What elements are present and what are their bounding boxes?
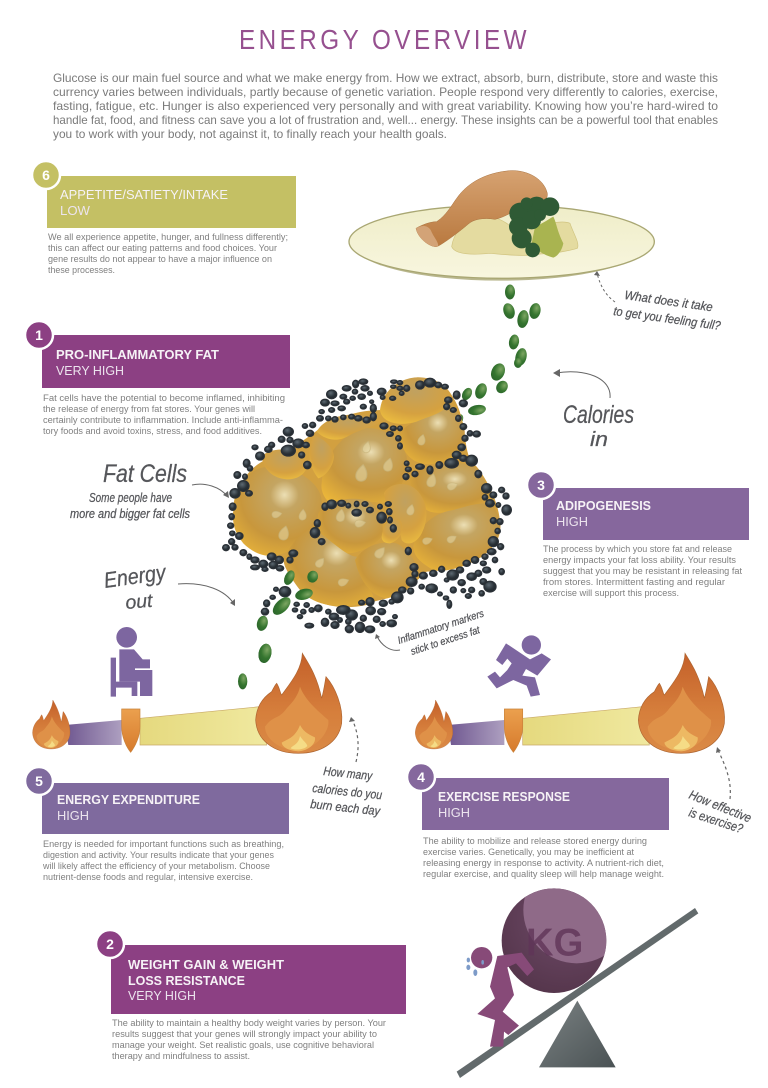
panel: weight gain and weight loss resistance: LOSS RESISTANCE [128,973,245,988]
panel: energy expenditure: ENERGY EXPENDITURE [57,792,200,807]
annotation: energy out: Energy [102,559,169,593]
annotation: fat cells [70,460,229,521]
annotation: how effective is exercise: is exercise? [687,805,746,836]
panel: energy expenditure: 5 [35,773,43,789]
annotation: fat cells: Fat Cells [103,460,187,488]
annotation: fat cells: Some people have [89,491,172,505]
annotation: how many calories: burn each day [310,797,381,818]
annotation: calories in: Calories [563,401,634,429]
panel: adipogenesis: ADIPOGENESIS [556,498,651,513]
seesaw: energy expenditure [33,643,342,753]
intro paragraph: handle fat, food, and fitness can save you a lot of frustration and, well... energy. These insights can be a powerful tool that enables [53,114,718,127]
panel: appetite satiety intake: LOW [60,203,91,218]
beans on lower fat cells [255,569,320,664]
panel: appetite satiety intake: APPETITE/SATIETY/INTAKE [60,187,228,202]
panel: adipogenesis: suggest that you may be resistant in releasing fat [543,566,742,577]
panel: exercise response: EXERCISE RESPONSE [438,789,570,804]
panel: pro-inflammatory fat: certainly contribute to inflammation. Include anti-inflamma- [43,415,283,426]
annotation: how many calories: How many [323,764,373,783]
panel: adipogenesis: The process by which you store fat and release [543,544,732,555]
panel: pro-inflammatory fat: Fat cells have the potential to become inflamed, inhibiting [43,393,285,404]
panel: appetite satiety intake: 6 [42,167,50,183]
icon: running person [487,635,551,697]
panel: weight gain and weight loss resistance: VERY HIGH [128,988,196,1003]
panel: weight gain and weight loss resistance: The ability to maintain a healthy body weight varies by person. Your [112,1018,387,1029]
intro paragraph: you to work with your body, not against it, to finally reach your health goals. [53,128,447,141]
panel: pro-inflammatory fat: tory foods and avoid toxins, stress, and food additives. [43,426,262,437]
panel: adipogenesis: exercise will support this process. [543,588,679,599]
panel: adipogenesis: HIGH [556,514,588,529]
panel: pro-inflammatory fat [25,321,290,437]
inflammatory marker particles [223,378,511,633]
panel: adipogenesis [527,471,749,599]
title: ENERGY OVERVIEW [239,24,530,55]
panel: adipogenesis: 3 [537,477,545,493]
intro paragraph: Glucose is our main fuel source and what we make energy from. How we extract, absorb, burn, distribute, store and waste this [53,72,718,85]
panel: energy expenditure: Energy is needed for important functions such as breathing, [43,839,284,850]
illustration: fat cell cluster [223,377,511,664]
annotation: inflammatory markers: Inflammatory markers [396,607,486,647]
annotation: energy out [102,559,235,614]
annotation: how many calories: calories do you [312,781,383,802]
panel: adipogenesis: from stores. Intermittent fasting and regular [543,577,726,588]
panel: weight gain and weight loss resistance: therapy and mindfulness to assist. [112,1051,250,1062]
panel: appetite satiety intake [32,161,296,276]
panel: energy expenditure [25,767,289,883]
illustration: person pushing KG boulder up lever: KG [526,920,583,964]
panel: energy expenditure: will likely affect the efficiency of your metabolism. Choose [42,861,270,872]
intro paragraph: currency varies between individuals, partly because of genetic variation. People respond very differently to calories, exercise, [53,86,718,99]
annotation: what does it take: What does it take [624,288,714,314]
annotation: what does it take [594,271,722,333]
annotation: how effective is exercise: How effective [687,787,754,826]
panel: exercise response: regular exercise, and quality sleep will help manage weight. [423,869,664,880]
annotation: calories in: in [590,429,608,451]
panel: energy expenditure: nutrient-dense foods and regular, intensive exercise. [43,872,253,883]
annotation: inflammatory markers: stick to excess fat [409,624,482,658]
panel: appetite satiety intake: these processes. [48,265,115,276]
intro paragraph [53,72,718,141]
panel: adipogenesis: energy impacts your fat loss ability. Your results [543,555,736,566]
icon: seated person [111,627,152,697]
panel: energy expenditure: HIGH [57,808,89,823]
panel: pro-inflammatory fat: VERY HIGH [56,363,124,378]
panel: pro-inflammatory fat: PRO-INFLAMMATORY FAT [56,347,219,362]
panel: appetite satiety intake: We all experience appetite, hunger, and fullness differently; [48,232,288,243]
panel: weight gain and weight loss resistance: WEIGHT GAIN & WEIGHT [128,957,284,972]
panel: energy expenditure: digestion and activity. Your results indicate that your genes [43,850,274,861]
intro paragraph: fasting, fatigue, etc. Hunger is also experienced very personally and with great variability. Knowing how you’re hard-wired to [53,100,718,113]
panel: exercise response [407,763,669,880]
panel: exercise response: The ability to mobilize and release stored energy during [423,836,647,847]
panel: appetite satiety intake: this can affect our eating patterns and food choices. Your [48,243,278,254]
panel: appetite satiety intake: gene results do not appear to have a major influence on [48,254,272,265]
panel: exercise response: releasing energy in response to activity. A nutrient-rich diet, [423,858,664,869]
annotation: how effective is exercise [687,747,754,836]
illustration: person pushing KG boulder up lever [456,888,698,1078]
panel: exercise response: HIGH [438,805,470,820]
panel: weight gain and weight loss resistance: results suggest that your genes will strongly impact your ability to [112,1029,377,1040]
panel: weight gain and weight loss resistance: manage your weight. Set realistic goals, use cognitive behavioral [112,1040,374,1051]
annotation: energy out: out [125,591,154,614]
beans near flame [238,643,273,689]
panel: exercise response: 4 [417,769,425,785]
panel: weight gain and weight loss resistance: 2 [106,936,114,952]
annotation: calories in [553,369,634,451]
panel: weight gain and weight loss resistance [96,930,406,1062]
annotation: how many calories [310,717,383,818]
panel: pro-inflammatory fat: the release of energy from fat stores. Your genes will [43,404,255,415]
panel: exercise response: exercise varies. Genetically, you may be inefficient at [423,847,634,858]
beans: glucose falling from plate to fat [451,284,542,428]
annotation: inflammatory markers [375,607,486,658]
annotation: what does it take: to get you feeling full? [613,304,722,333]
annotation: fat cells: more and bigger fat cells [70,507,190,521]
panel: pro-inflammatory fat: 1 [35,327,43,343]
illustration: plate of food [349,171,654,281]
seesaw: exercise response [415,653,725,753]
